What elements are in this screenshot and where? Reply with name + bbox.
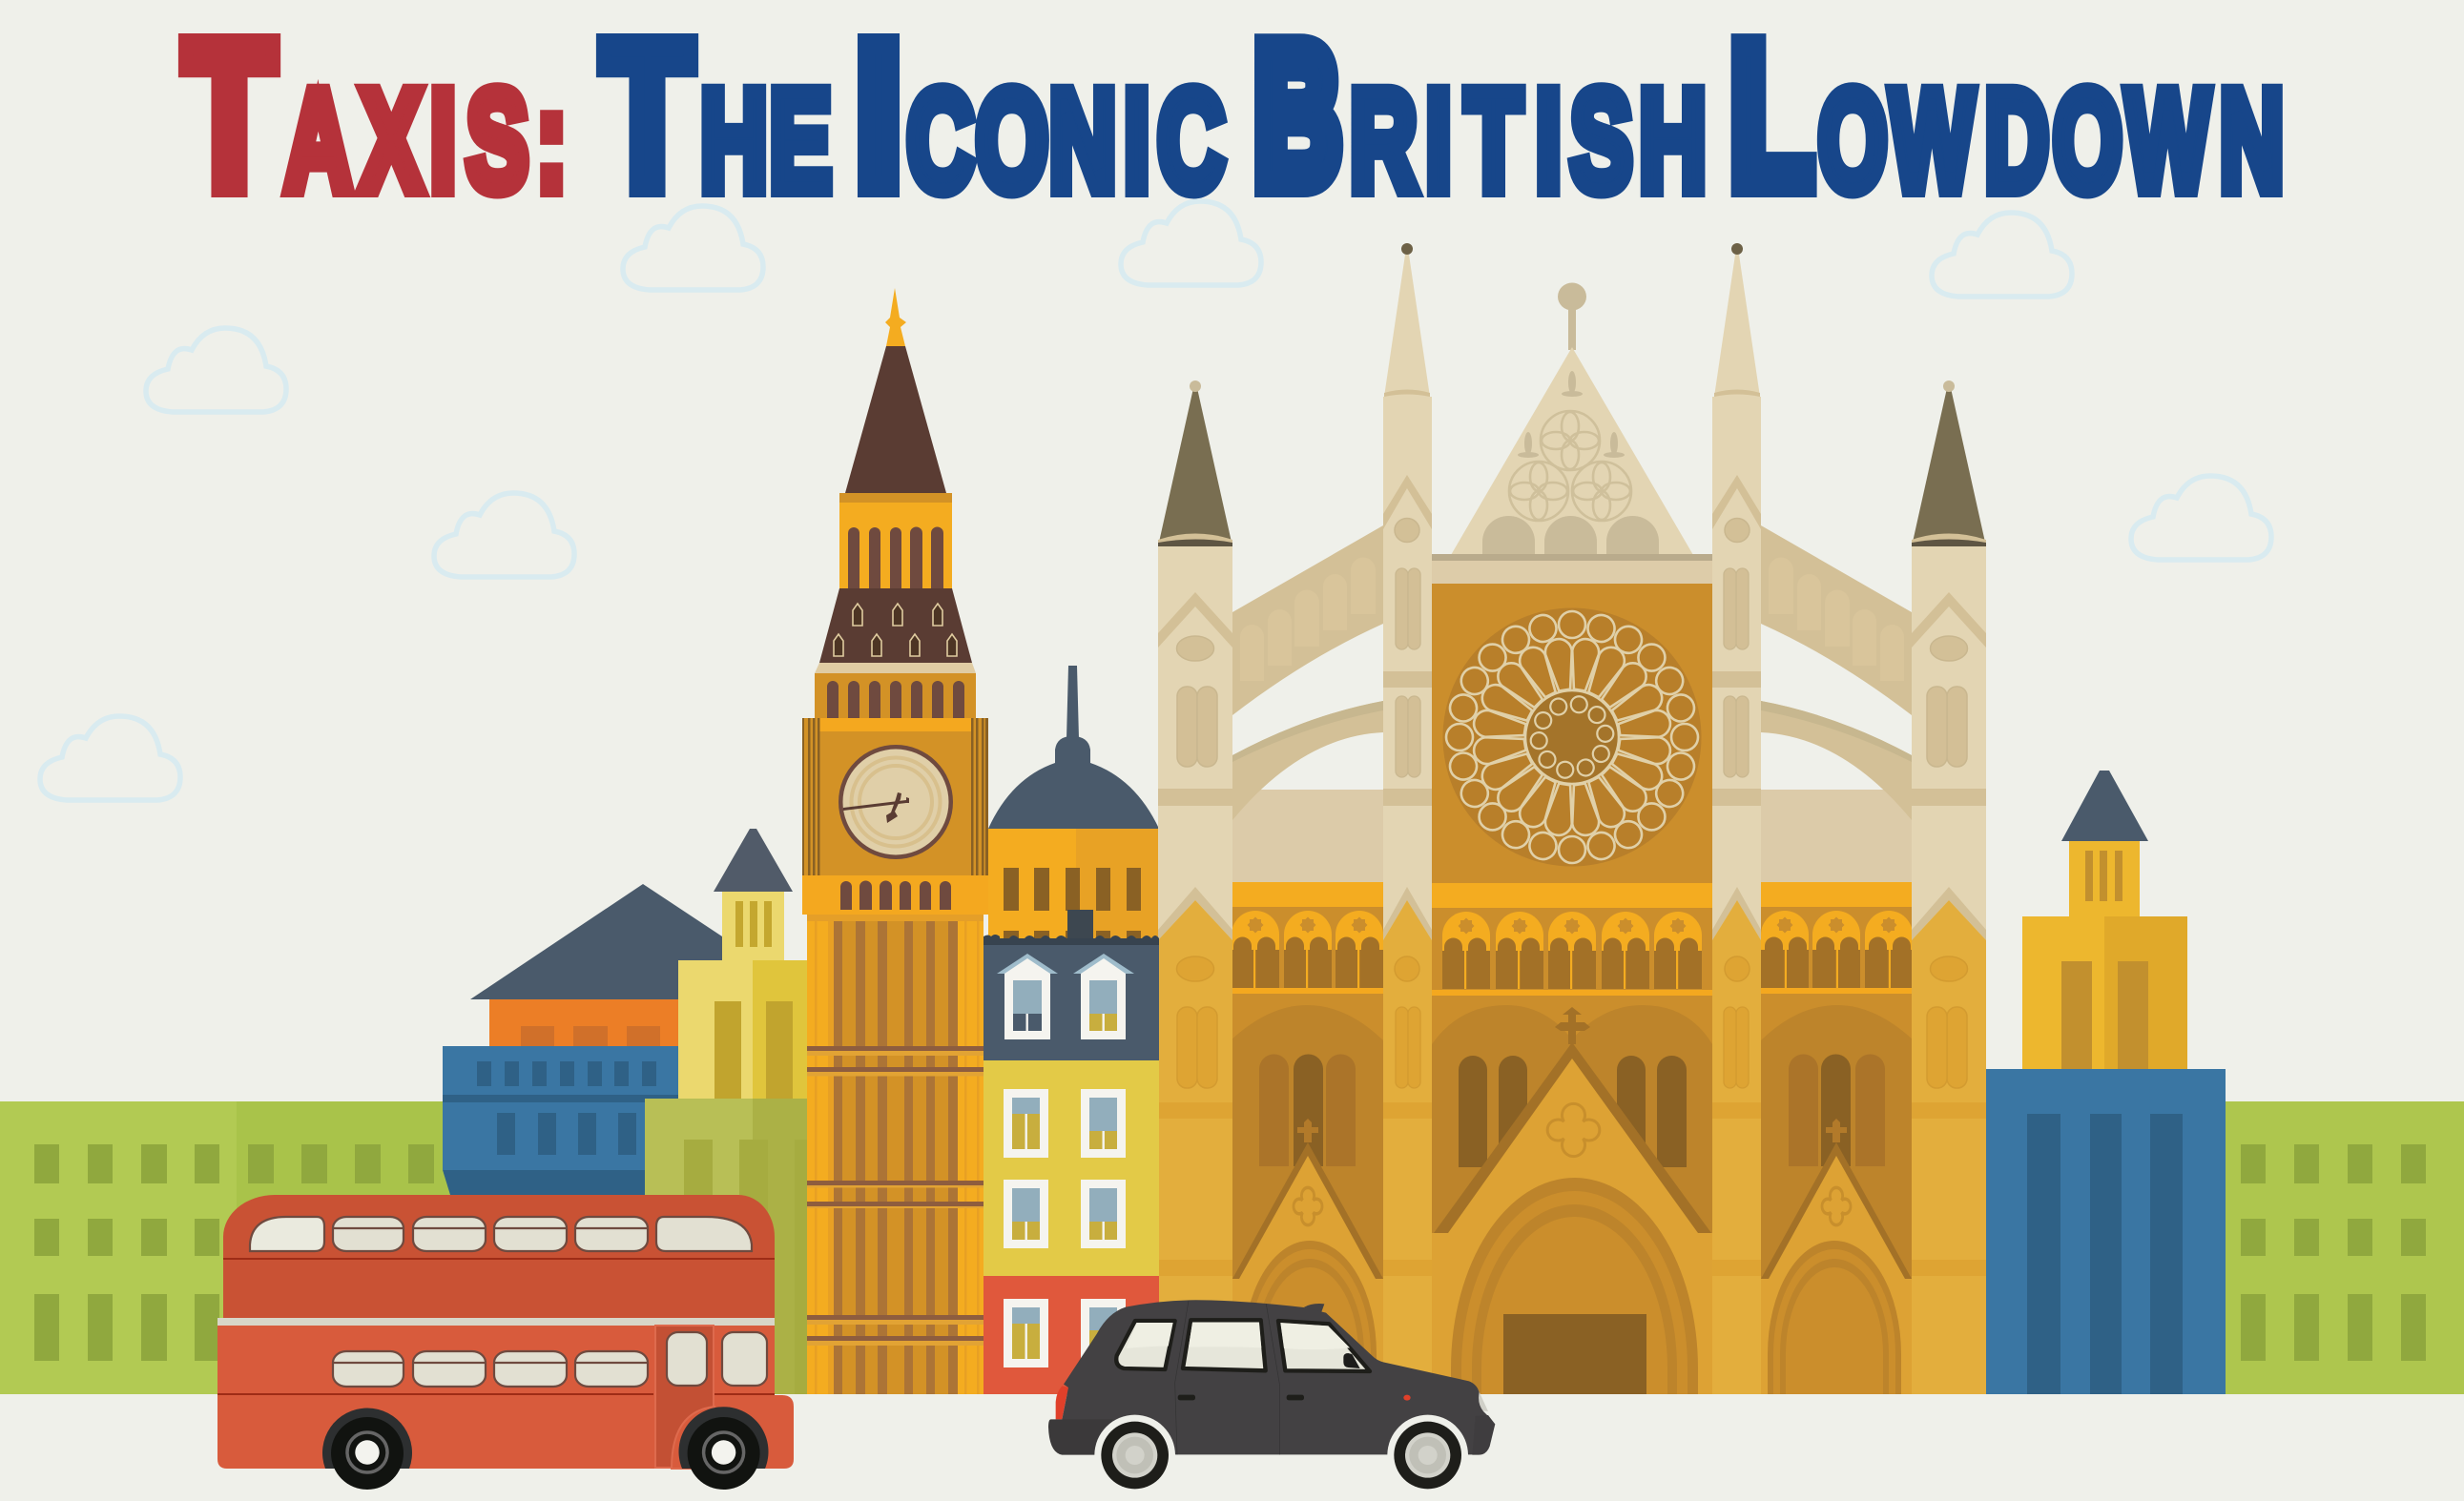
yellow tower <box>714 829 793 960</box>
slate roof <box>470 884 722 999</box>
title: B <box>1254 5 1341 227</box>
body <box>1062 1300 1490 1454</box>
clouds <box>40 201 2271 800</box>
title: T <box>602 0 693 232</box>
windows <box>1116 1320 1370 1371</box>
green terrace right <box>2226 1101 2464 1394</box>
right wing <box>1712 243 1986 1394</box>
front wheel <box>1387 1415 1468 1495</box>
green terrace left <box>0 1101 456 1394</box>
left wing <box>1158 243 1432 1394</box>
title <box>184 0 2284 232</box>
central ochre wall <box>1432 584 1712 883</box>
lower deck <box>217 1325 794 1469</box>
spoiler <box>1304 1304 1324 1313</box>
front bumper <box>1472 1415 1495 1455</box>
central gable <box>1432 282 1712 584</box>
rear wheel <box>322 1408 412 1490</box>
clock housing <box>802 718 988 875</box>
spire <box>845 346 946 493</box>
front wheel <box>678 1407 769 1490</box>
title: CONIC <box>907 60 1225 220</box>
tail light <box>1056 1386 1068 1419</box>
title: L <box>1729 0 1813 230</box>
upper deck <box>223 1195 775 1318</box>
rear bumper <box>1048 1419 1113 1455</box>
title: RITISH <box>1350 60 1707 220</box>
domed building <box>988 666 1159 943</box>
mirror <box>1343 1353 1360 1368</box>
chimney <box>1067 910 1093 940</box>
olive building <box>645 1099 810 1394</box>
black taxi <box>1048 1300 1495 1495</box>
central arcade <box>1432 883 1712 1394</box>
slate roof with gablets <box>815 588 976 673</box>
orange storey <box>489 999 680 1046</box>
blue building <box>443 1046 681 1199</box>
finial <box>885 288 906 346</box>
yellow floors <box>984 1060 1159 1276</box>
door lines <box>1175 1301 1280 1454</box>
window highlights <box>1127 1323 1350 1349</box>
lower arcade band <box>802 875 988 921</box>
headlight <box>1477 1389 1488 1411</box>
arcade band <box>815 673 976 718</box>
roof crest <box>984 935 1159 945</box>
indicator <box>1403 1395 1411 1401</box>
rose window <box>1442 608 1702 866</box>
mansard roof <box>984 945 1159 1060</box>
red ground floor <box>984 1276 1159 1394</box>
central lower wall and portal <box>1432 1005 1712 1394</box>
title: AXIS: <box>284 60 567 220</box>
tall townhouse <box>984 910 1159 1394</box>
title: HE <box>700 60 832 220</box>
door handles <box>1178 1395 1195 1400</box>
belfry <box>839 493 952 588</box>
title: T <box>184 0 275 232</box>
title: OWDOWN <box>1818 61 2284 220</box>
clock face <box>839 745 953 859</box>
dormer left <box>997 954 1058 1039</box>
left buildings group <box>443 829 810 1394</box>
title: I <box>855 0 902 232</box>
Big Ben <box>802 288 988 1394</box>
door <box>655 1326 714 1468</box>
yellow building <box>678 960 810 1100</box>
rear wheel <box>1094 1415 1175 1495</box>
Westminster Abbey <box>1158 243 1986 1394</box>
lower windows <box>333 1332 767 1387</box>
right blue and gold building <box>1986 771 2226 1394</box>
red double-decker bus <box>217 1195 794 1490</box>
upper windows <box>250 1217 752 1251</box>
dormer right <box>1073 954 1134 1039</box>
tower shaft <box>807 921 984 1394</box>
